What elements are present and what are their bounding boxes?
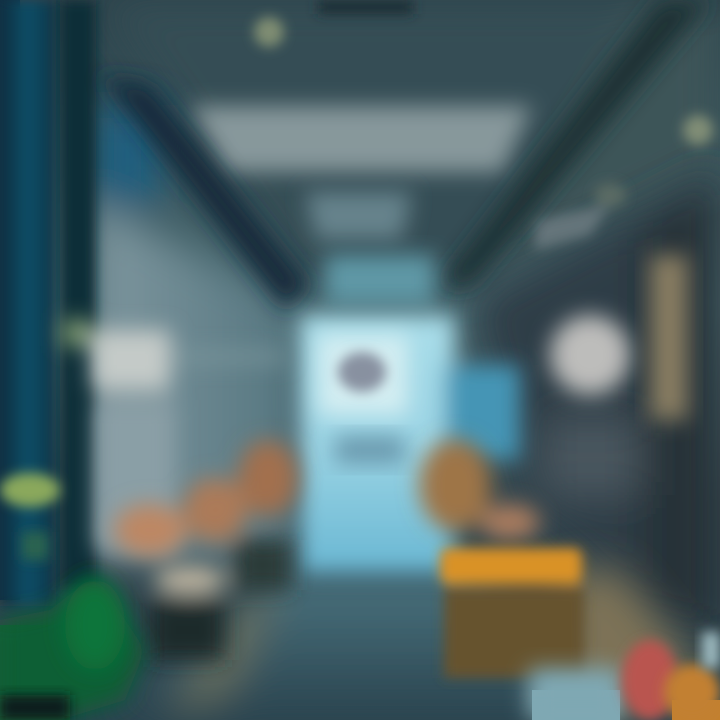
ceiling light panel [190, 106, 532, 172]
distant corridor [325, 255, 435, 305]
left glass wall [90, 105, 300, 560]
left figure and light fixture [62, 320, 285, 550]
left orange lounge chairs [114, 440, 298, 660]
window sign [318, 335, 408, 464]
right dark wall [470, 170, 720, 640]
tan wall panel [650, 255, 688, 420]
dark ceiling beams [100, 0, 710, 310]
green plant [0, 575, 145, 720]
green wall light [0, 473, 60, 560]
secondary light panel [305, 192, 412, 240]
right orange lounge chairs [419, 439, 540, 540]
floor [90, 570, 700, 720]
orange table [440, 548, 584, 678]
left teal column [0, 0, 96, 606]
round white lamp [550, 315, 630, 395]
ceiling [100, 0, 720, 290]
bright window [300, 315, 520, 573]
foreground red and orange cushions [622, 632, 720, 720]
foreground blue seat [528, 668, 623, 720]
ceiling spotlights [254, 0, 713, 250]
